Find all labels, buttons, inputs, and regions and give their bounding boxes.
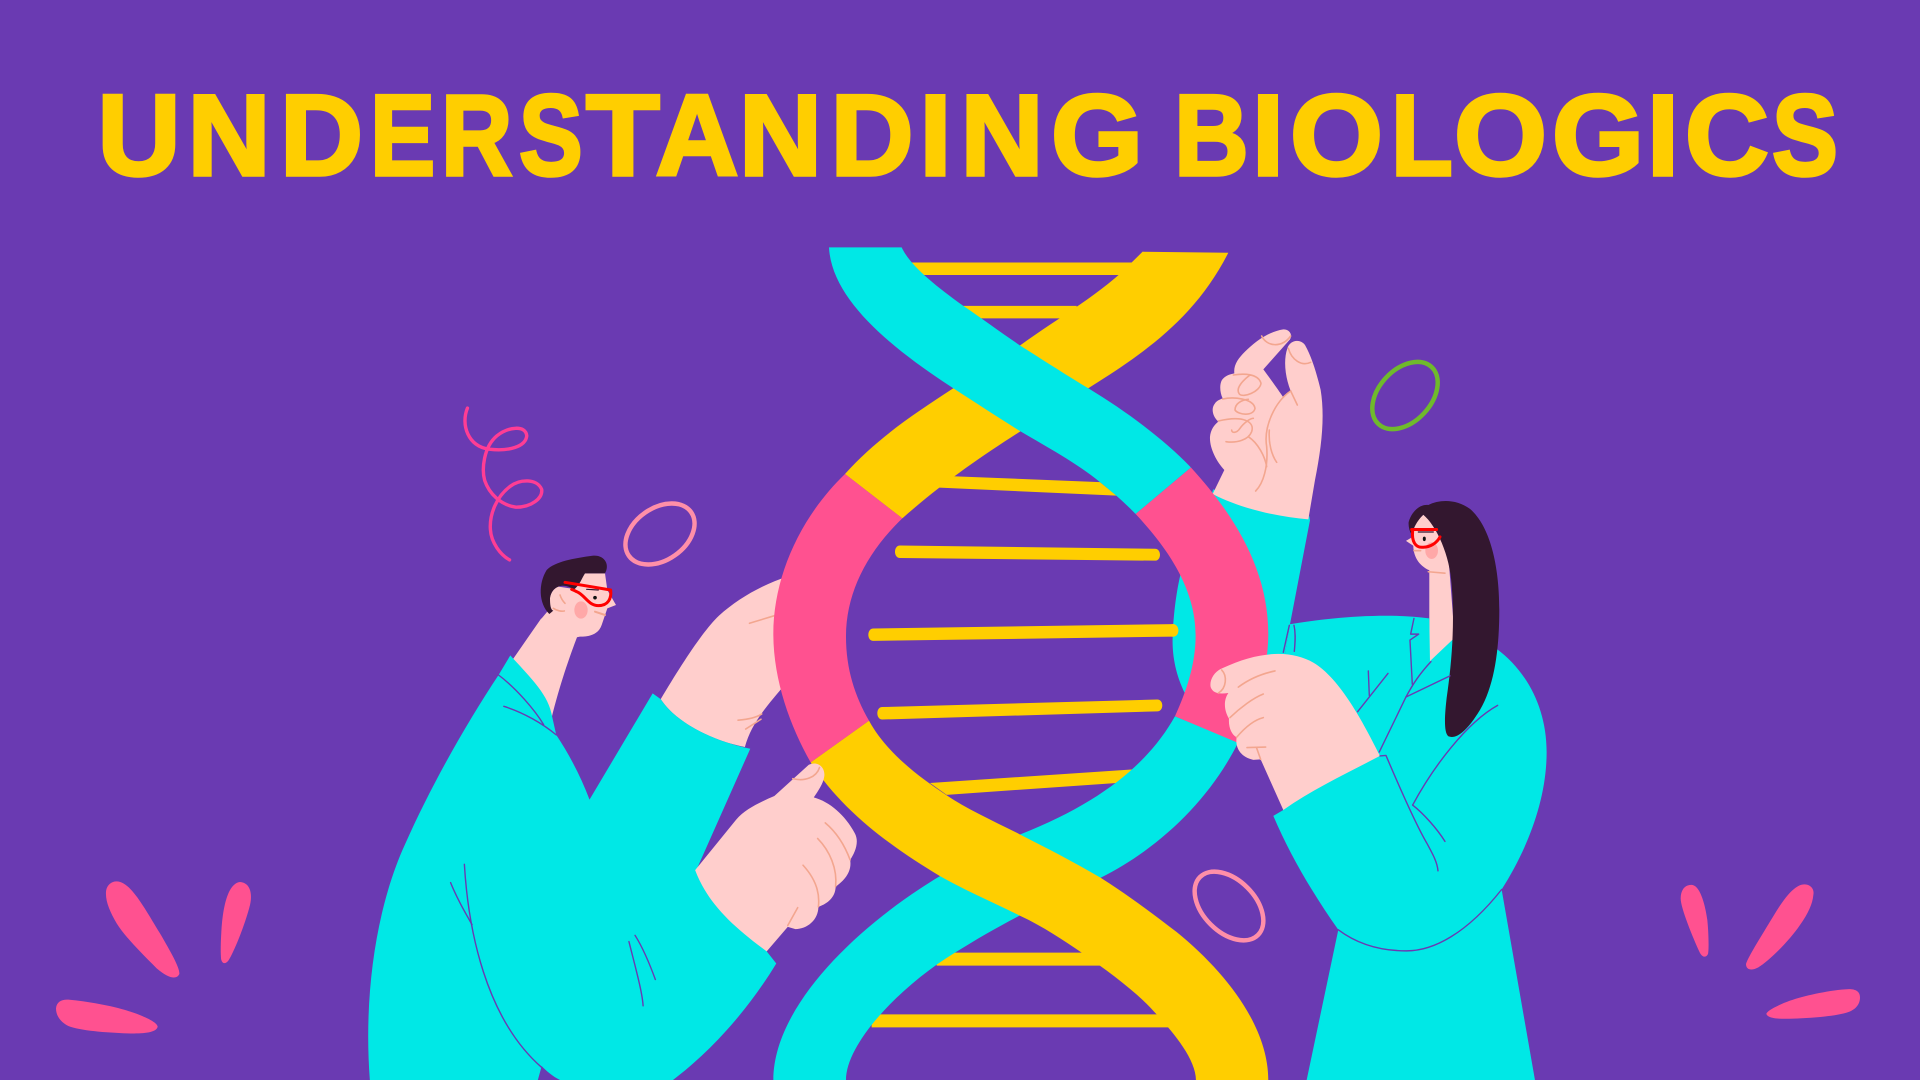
title: S xyxy=(519,72,583,200)
head xyxy=(541,556,616,640)
cyan strand, upper xyxy=(829,247,1191,514)
neck xyxy=(508,608,578,719)
decorative burst: right xyxy=(1681,884,1860,1019)
ring: pink upper left xyxy=(614,491,706,577)
title: I xyxy=(1647,72,1679,200)
title xyxy=(98,72,1838,200)
coat torso and near arm xyxy=(1273,616,1547,951)
coat and finger lines xyxy=(451,675,850,1067)
title: L xyxy=(1391,72,1453,200)
title: I xyxy=(920,72,951,200)
cyan strand, lower xyxy=(773,716,1238,1080)
title: G xyxy=(1050,72,1143,200)
rung over sleeve xyxy=(1172,624,1178,637)
title: E xyxy=(370,72,435,200)
title: C xyxy=(1684,72,1768,200)
title: B xyxy=(1174,72,1248,200)
lab coat xyxy=(368,655,776,1080)
man: far hand behind DNA xyxy=(661,576,788,747)
title: O xyxy=(1454,72,1547,200)
DNA double helix xyxy=(773,247,1268,1080)
yellow strand, upper xyxy=(845,252,1228,518)
title: T xyxy=(586,72,660,200)
neck and face xyxy=(1406,515,1455,666)
title: A xyxy=(656,72,739,200)
title: D xyxy=(830,72,914,200)
title: S xyxy=(1772,72,1838,200)
coat and finger lines xyxy=(1218,530,1502,951)
pink strand, right xyxy=(1136,467,1268,742)
woman: figure xyxy=(1210,501,1547,1080)
coat skirt xyxy=(1307,889,1535,1080)
title: I xyxy=(1252,72,1284,200)
cheek and eye xyxy=(1425,542,1438,559)
title: O xyxy=(1290,72,1383,200)
title: N xyxy=(188,72,271,200)
title: U xyxy=(98,72,181,200)
pinching hand xyxy=(1210,329,1323,519)
decorative burst: left xyxy=(56,881,251,1033)
man: figure xyxy=(368,556,857,1080)
title: N xyxy=(960,72,1044,200)
squiggle: pink curl xyxy=(465,408,542,560)
title: G xyxy=(1552,72,1644,200)
pink strand, left xyxy=(773,474,902,762)
title: R xyxy=(441,72,512,200)
helix rungs xyxy=(868,263,1178,1027)
ring: pink lower right xyxy=(1182,859,1276,953)
near hand holding DNA xyxy=(695,764,857,951)
hair xyxy=(1409,501,1499,737)
title: D xyxy=(280,72,363,200)
near hand holding DNA xyxy=(1210,654,1380,810)
title: N xyxy=(739,72,822,200)
woman: raised arm and pinching hand xyxy=(1173,329,1323,698)
yellow strand, lower xyxy=(811,721,1268,1080)
sleeve of raised arm xyxy=(1173,489,1310,698)
ring: green xyxy=(1359,349,1451,442)
